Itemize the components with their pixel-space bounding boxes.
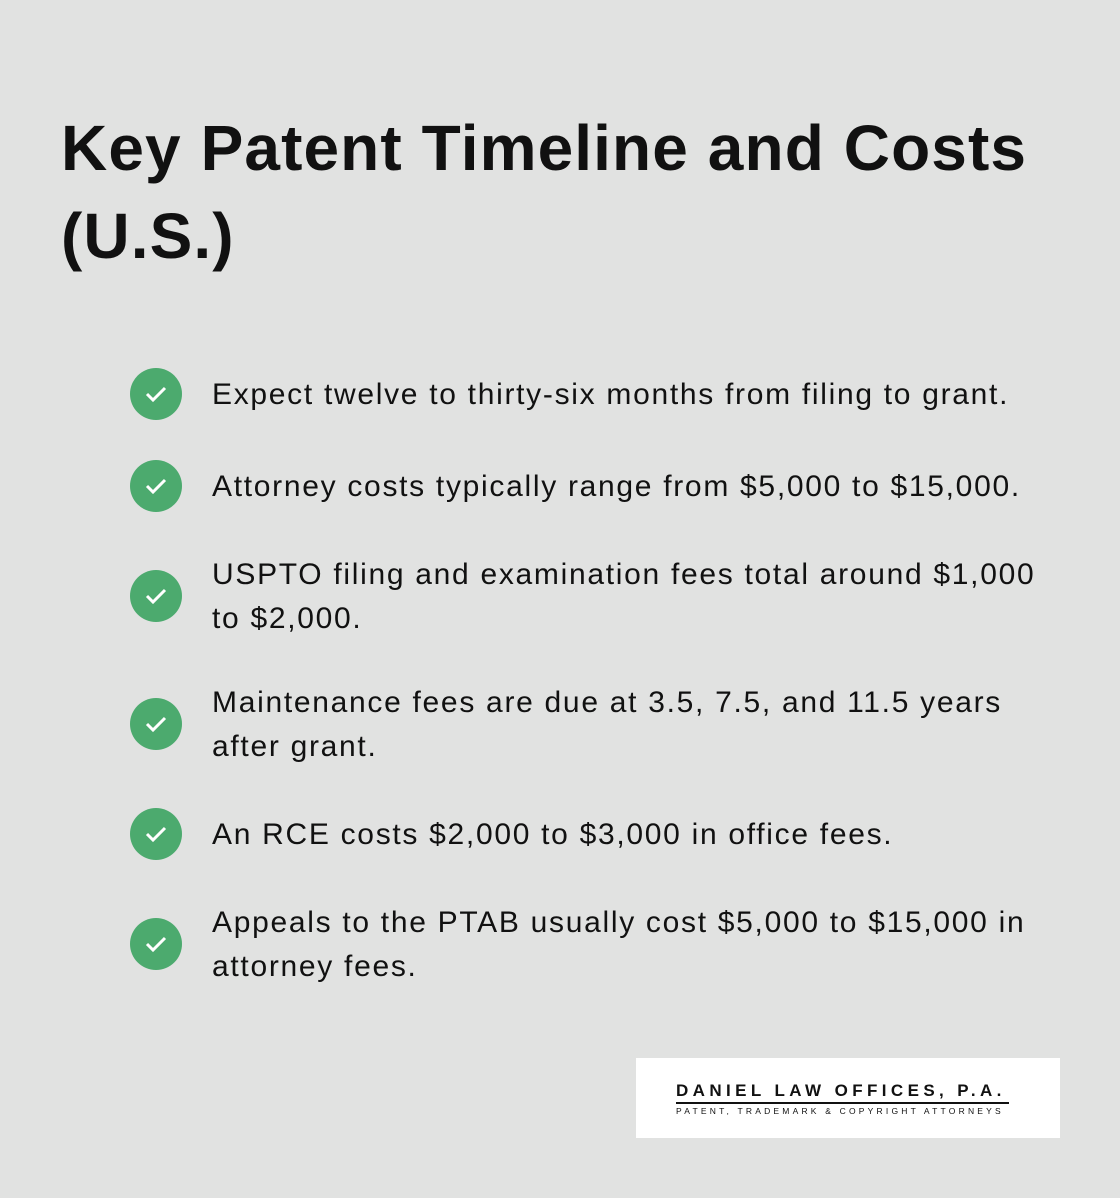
item 4: Maintenance fees are due at 3.5, 7.5, and 11.5 years after grant. xyxy=(212,686,1002,763)
logo xyxy=(636,1058,1060,1138)
item 1: Expect twelve to thirty-six months from filing to grant. xyxy=(212,378,1009,411)
item 2: Attorney costs typically range from $5,000 to $15,000. xyxy=(212,470,1021,503)
logo: PATENT, TRADEMARK & COPYRIGHT ATTORNEYS xyxy=(676,1106,1004,1116)
item 5: An RCE costs $2,000 to $3,000 in office fees. xyxy=(212,818,893,851)
item 3: USPTO filing and examination fees total around $1,000 to $2,000. xyxy=(212,558,1035,635)
icon: check xyxy=(130,808,182,860)
item 6: Appeals to the PTAB usually cost $5,000 to $15,000 in attorney fees. xyxy=(212,906,1025,983)
item 2 xyxy=(130,460,1021,512)
icon: check xyxy=(130,460,182,512)
icon: check xyxy=(130,570,182,622)
item 5 xyxy=(130,808,893,860)
icon: check xyxy=(130,918,182,970)
title: Key Patent Timeline and Costs (U.S.) xyxy=(61,112,1027,272)
logo: DANIEL LAW OFFICES, P.A. xyxy=(676,1081,1006,1100)
icon: check xyxy=(130,698,182,750)
icon: check xyxy=(130,368,182,420)
item 1 xyxy=(130,368,1009,420)
